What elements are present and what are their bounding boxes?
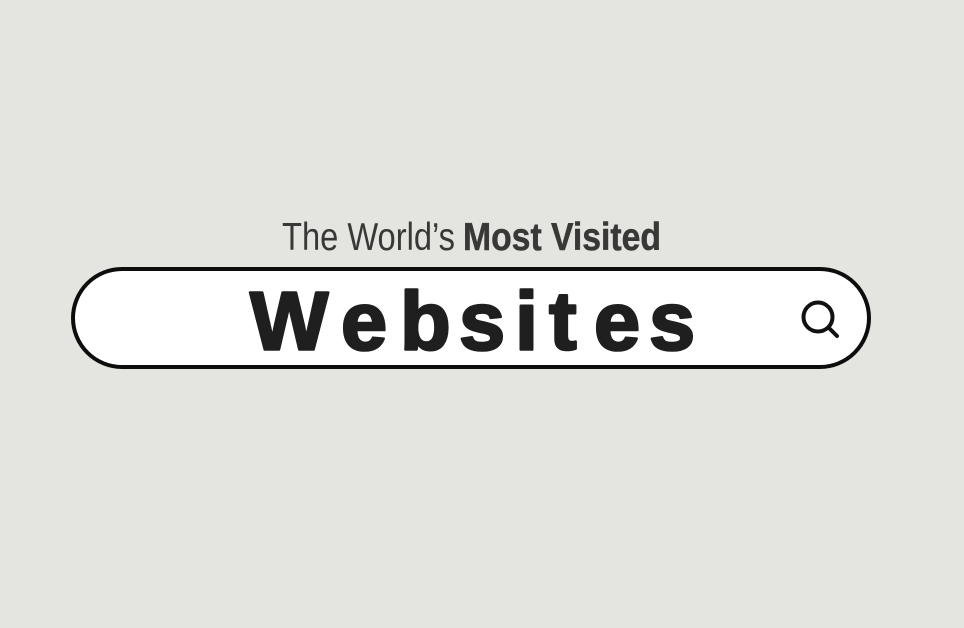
icon: magnifying glass <box>804 302 837 336</box>
search bar term: Websites: Websites <box>250 274 695 368</box>
search bar <box>73 269 869 368</box>
heading: The World's Most Visited <box>282 216 661 259</box>
heading: The World's Most Visited: The World’s <box>282 216 455 259</box>
heading: The World's Most Visited: Most Visited <box>463 216 661 259</box>
